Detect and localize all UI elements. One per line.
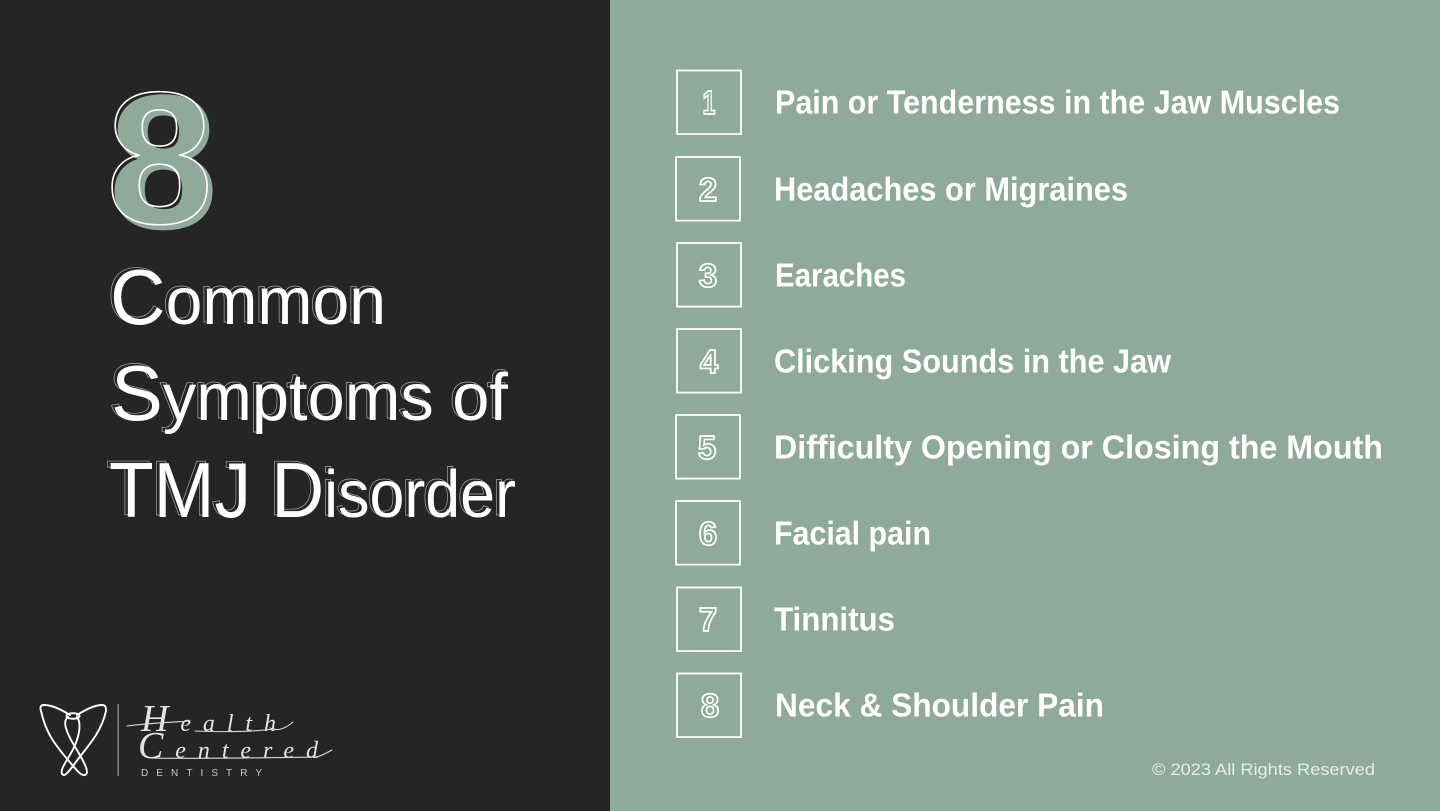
heading line: Symptoms of: Symptoms of (111, 349, 508, 437)
item 6: 6 (699, 515, 717, 552)
item 6: Facial pain (774, 514, 931, 552)
heading line: Common: Common (107, 251, 383, 339)
big number 8: 8 (106, 53, 213, 263)
big number 8: 8 (110, 57, 217, 267)
logo script: Health: H ealth (140, 698, 276, 740)
panel: left dark background (0, 0, 610, 811)
heading line: TMJ Disorder: TMJ Disorder (106, 444, 513, 532)
logo text: Dentistry: DENTISTRY (141, 768, 262, 779)
item 2 (676, 157, 1128, 221)
logo swash strokes (127, 721, 332, 758)
item 5 (676, 415, 1383, 479)
item 1 (677, 70, 1340, 134)
heading line: Common: Common (110, 253, 386, 341)
item 3 (677, 243, 906, 307)
item 7: Tinnitus (774, 600, 895, 638)
item 3: 3 (699, 257, 717, 294)
title: 8 Common Symptoms of TMJ Disorder (106, 53, 516, 534)
divider (118, 704, 119, 776)
panel: right green background (610, 0, 1440, 811)
item 3: Earaches (775, 256, 906, 294)
symptom list (676, 70, 1383, 737)
copyright note: © 2023 All Rights Reserved (1152, 760, 1375, 779)
item 1: 1 (702, 84, 716, 121)
logo script: Centered: C entered (138, 725, 319, 767)
item 8: 8 (701, 687, 719, 724)
icon: tooth line mark (40, 705, 106, 775)
item 4: Clicking Sounds in the Jaw (774, 342, 1171, 380)
item 2: Headaches or Migraines (774, 170, 1128, 208)
heading line: TMJ Disorder: TMJ Disorder (109, 446, 516, 534)
item 1: Pain or Tenderness in the Jaw Muscles (775, 84, 1340, 120)
item 8: Neck & Shoulder Pain (775, 686, 1104, 724)
item 7 (677, 588, 895, 651)
item 5: Difficulty Opening or Closing the Mouth (774, 428, 1383, 466)
item 4 (677, 329, 1171, 393)
item 6 (676, 501, 931, 565)
item 4: 4 (700, 343, 719, 380)
logo: Health Centered Dentistry (40, 698, 332, 779)
item 5: 5 (698, 429, 716, 466)
item 7: 7 (699, 601, 717, 638)
item 8 (677, 674, 1104, 737)
heading line: Symptoms of: Symptoms of (108, 347, 505, 435)
item 2: 2 (699, 171, 717, 208)
